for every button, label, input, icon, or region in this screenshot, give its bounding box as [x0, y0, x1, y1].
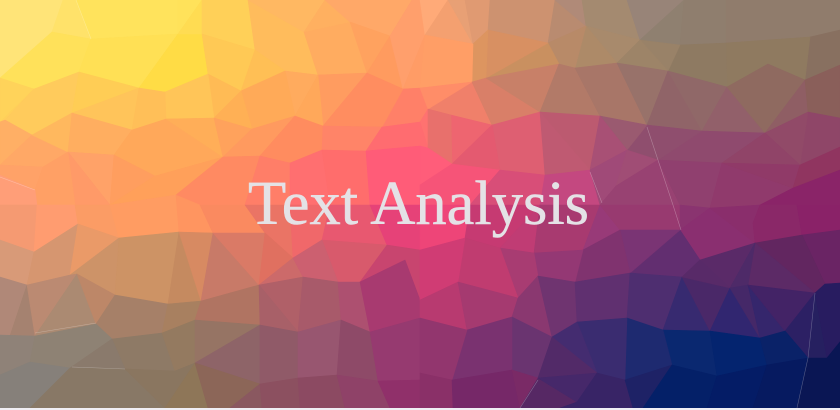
title: Text Analysis — [248, 170, 589, 238]
